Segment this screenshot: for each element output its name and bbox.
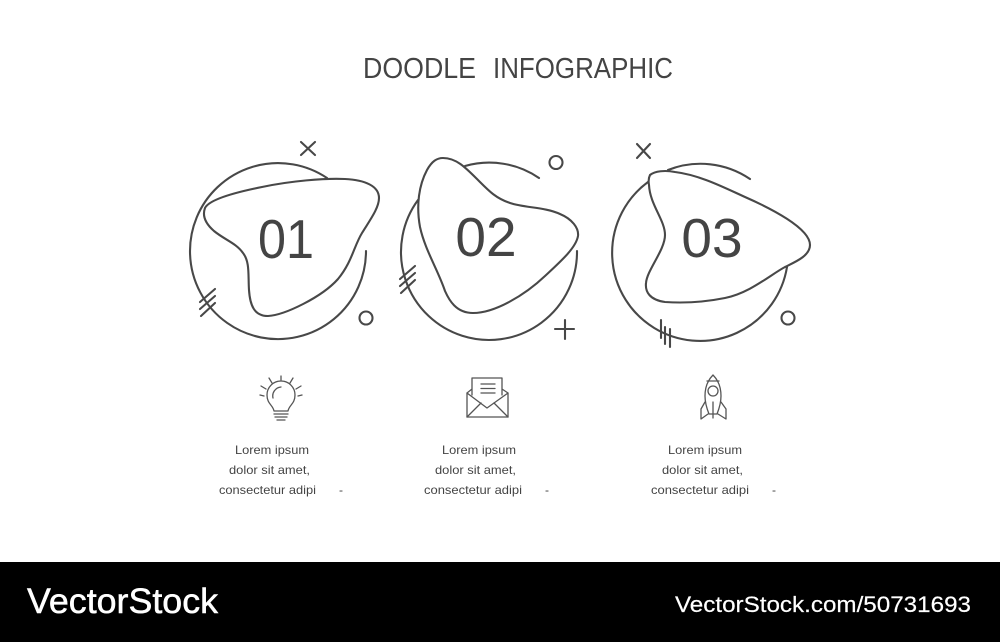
footer url: VectorStock.com/50731693: [675, 592, 971, 617]
footer logo: VectorStock: [27, 582, 219, 621]
text block 03: dolor sit amet,: [662, 463, 743, 477]
blob outline 01: [204, 179, 379, 316]
text block 03: consectetur adipi: [651, 483, 749, 497]
panel: step 02: [400, 156, 578, 340]
title: DOODLE: [363, 53, 476, 85]
text block 02: dolor sit amet,: [435, 463, 516, 477]
cross mark: [637, 144, 650, 158]
text block 02: -: [545, 483, 549, 497]
hatch marks: [661, 320, 670, 347]
small circle: [782, 312, 794, 324]
text block 02: [424, 443, 549, 497]
icon: rocket: [701, 375, 726, 419]
text block 02: consectetur adipi: [424, 483, 522, 497]
circle outline 02: [401, 163, 577, 340]
blob outline 02: [418, 158, 578, 313]
text block 03: -: [772, 483, 776, 497]
text block 02: Lorem ipsum: [442, 443, 516, 457]
text block 03: [651, 443, 776, 497]
hatch marks: [400, 266, 415, 293]
circle outline 03: [612, 164, 787, 341]
text block 01: Lorem ipsum: [235, 443, 309, 457]
title: INFOGRAPHIC: [493, 53, 673, 85]
small circle: [360, 312, 372, 324]
number 01: 01: [258, 208, 314, 270]
number 03: 03: [681, 207, 743, 269]
icon: envelope with letter: [467, 378, 508, 417]
footer bar: [0, 562, 1000, 642]
title: [363, 53, 673, 85]
circle outline 01: [190, 163, 366, 339]
panel: step 03: [612, 144, 810, 347]
small circle: [550, 156, 562, 169]
hatch marks: [200, 289, 215, 316]
number 02: 02: [455, 206, 517, 268]
icon: light bulb: [260, 376, 302, 420]
text block 01: consectetur adipi: [219, 483, 316, 497]
plus mark: [555, 320, 574, 339]
cross mark: [301, 142, 315, 155]
panel: step 01: [190, 142, 379, 339]
text block 01: dolor sit amet,: [229, 463, 310, 477]
text block 01: -: [339, 483, 343, 497]
blob outline 03: [646, 171, 810, 303]
text block 01: [219, 443, 343, 497]
text block 03: Lorem ipsum: [668, 443, 742, 457]
